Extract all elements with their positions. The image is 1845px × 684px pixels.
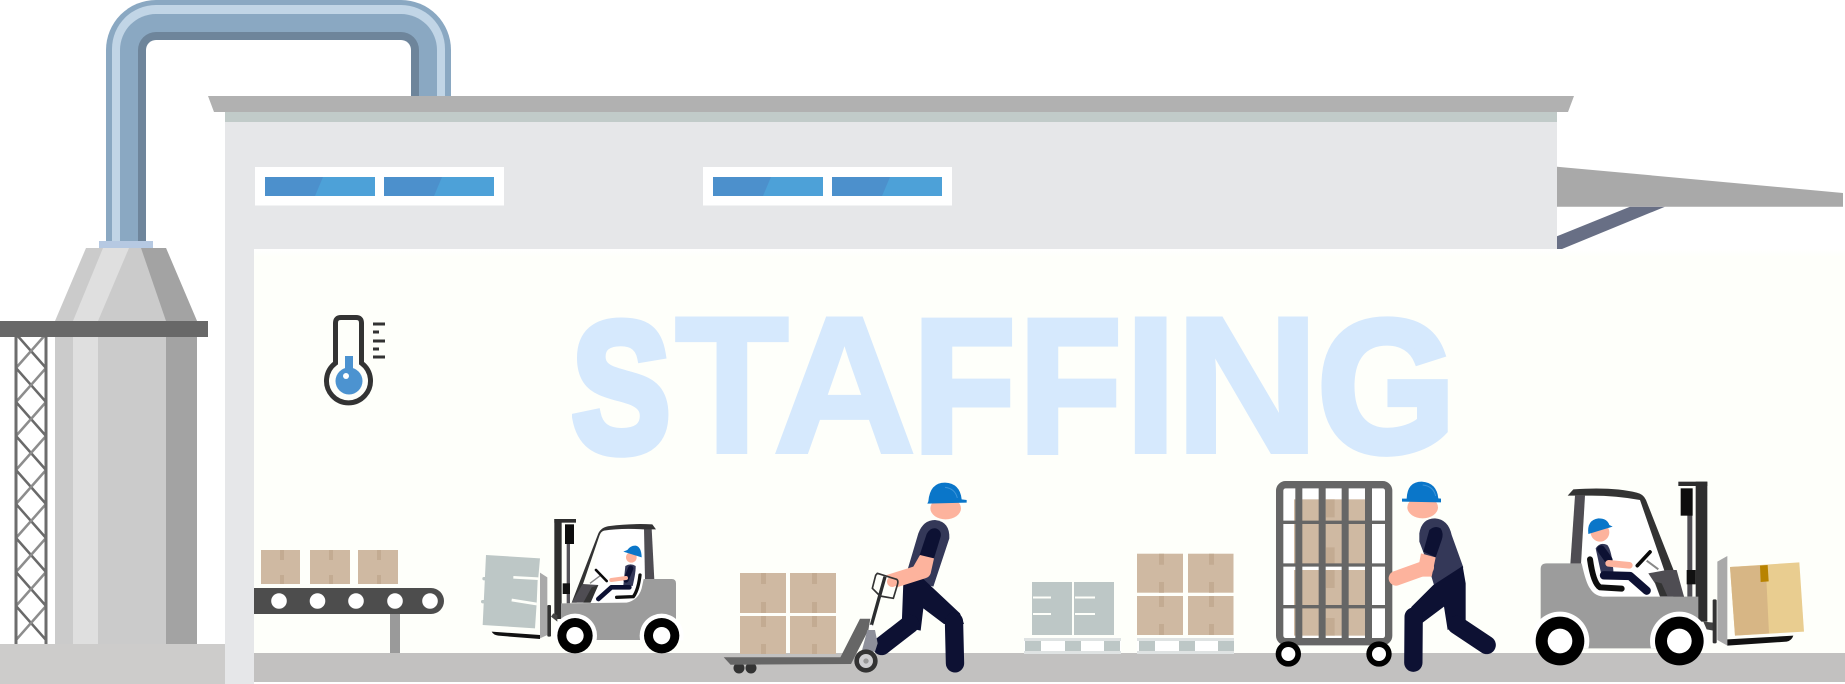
floor bbox=[254, 653, 1845, 682]
plinth bbox=[0, 644, 225, 684]
steel beam bbox=[0, 321, 208, 337]
worker pulling pallet jack bbox=[854, 483, 967, 673]
forklift with box bbox=[1531, 482, 1804, 670]
silo hopper and column bbox=[55, 241, 197, 644]
awning bbox=[1557, 167, 1843, 249]
title: STAFFING: S bbox=[572, 284, 670, 490]
conveyor boxes bbox=[261, 550, 398, 584]
warehouse building bbox=[208, 96, 1574, 684]
icon: thermometer bbox=[326, 318, 385, 403]
exhaust pipe bbox=[106, 0, 451, 245]
warehouse interior bbox=[254, 249, 1845, 653]
title: STAFFING: A bbox=[772, 277, 915, 494]
pallet jack bbox=[724, 619, 870, 674]
title: STAFFING: I bbox=[1124, 277, 1177, 494]
worker pushing roll cage bbox=[1396, 482, 1487, 663]
roll cage with boxes bbox=[1276, 485, 1392, 667]
stacked boxes on pallet jack bbox=[740, 573, 836, 654]
window right bbox=[703, 167, 952, 206]
title: STAFFING bbox=[572, 277, 1454, 494]
conveyor belt bbox=[254, 588, 444, 653]
title: STAFFING: N bbox=[1175, 277, 1319, 494]
title: STAFFING: T bbox=[675, 277, 789, 494]
forklift with barrels bbox=[483, 519, 684, 658]
barrels on pallet bbox=[1024, 582, 1121, 654]
window left bbox=[255, 167, 504, 206]
title: STAFFING: F bbox=[914, 281, 1014, 491]
lattice tower bbox=[16, 334, 46, 644]
title: STAFFING: G bbox=[1318, 282, 1454, 491]
boxes on pallet bbox=[1137, 554, 1234, 654]
title: STAFFING: F bbox=[1020, 281, 1120, 491]
